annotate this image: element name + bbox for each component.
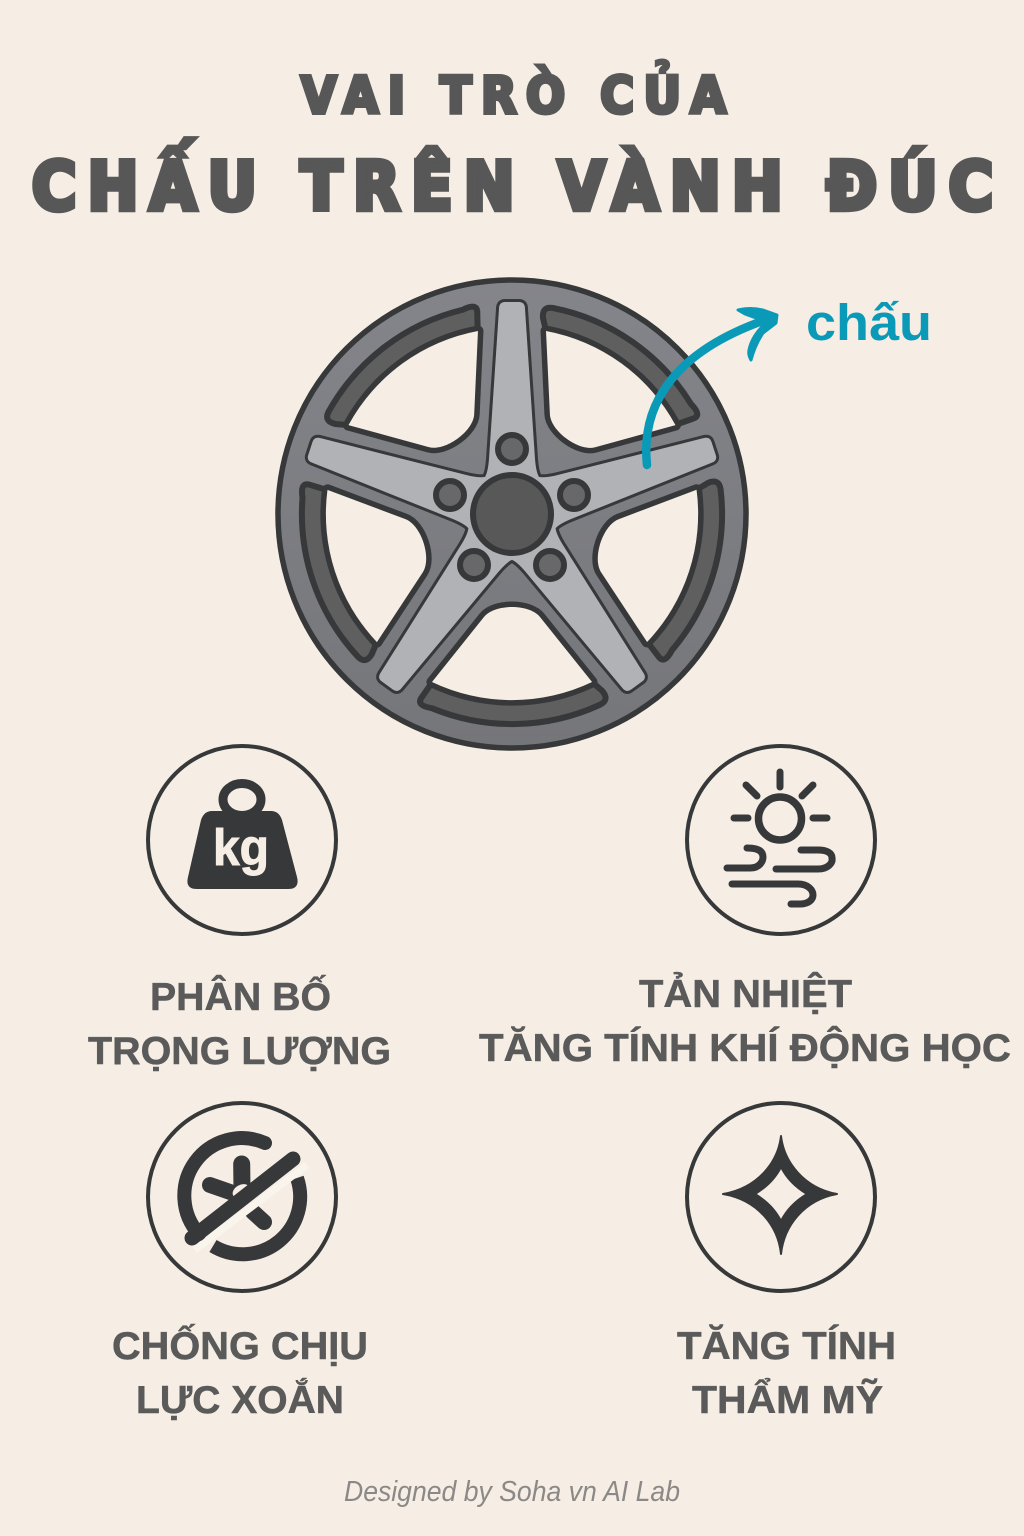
- icon: sparkle: [687, 1103, 875, 1291]
- icon: torsion resistance: [148, 1103, 336, 1291]
- title: [32, 59, 993, 226]
- heading: weight distribution: [88, 974, 391, 1073]
- icon: sun and wind: [687, 746, 875, 934]
- heading: aesthetics: THẨM MỸ: [692, 1377, 883, 1422]
- heading: weight distribution: TRỌNG LƯỢNG: [88, 1030, 391, 1073]
- heading: aesthetics: TĂNG TÍNH: [677, 1324, 896, 1368]
- arrow pointing to spoke: [646, 308, 777, 465]
- heading: aesthetics: [677, 1324, 896, 1422]
- credit: Designed by Soha vn AI Lab: [344, 1476, 680, 1508]
- heading: cooling and aerodynamics: TẢN NHIỆT: [639, 972, 852, 1016]
- heading: torsion resistance: LỰC XOẮN: [136, 1378, 344, 1422]
- wheel illustration: [241, 274, 765, 790]
- heading: torsion resistance: [112, 1323, 368, 1422]
- title: CHẤU TRÊN VÀNH ĐÚC: [32, 138, 993, 226]
- title: VAI TRÒ CỦA: [301, 59, 726, 126]
- icon: weight: kg: [213, 819, 269, 876]
- heading: cooling and aerodynamics: TĂNG TÍNH KHÍ ĐỘNG HỌC: [479, 1025, 1011, 1070]
- spoke label: chấu: [806, 294, 932, 351]
- heading: torsion resistance: CHỐNG CHỊU: [112, 1323, 368, 1368]
- icon: weight: [148, 746, 336, 934]
- heading: cooling and aerodynamics: [479, 972, 1011, 1070]
- heading: weight distribution: PHÂN BỐ: [150, 974, 331, 1019]
